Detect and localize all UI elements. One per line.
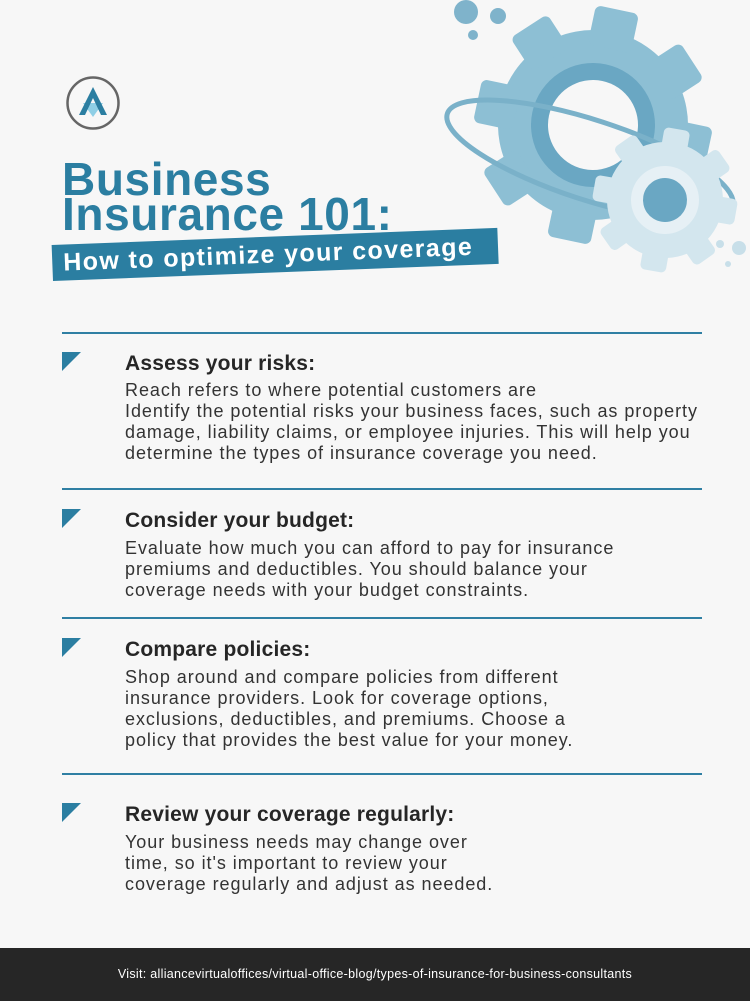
- item 1: [62, 352, 698, 463]
- item 3: [62, 638, 573, 750]
- logo: [66, 76, 120, 130]
- item 4: [62, 803, 493, 894]
- body: [125, 832, 493, 894]
- heading: Review your coverage regularly:: [125, 803, 455, 826]
- item 2: [62, 509, 614, 600]
- body: Evaluate how much you can afford to pay for insurance: [125, 538, 614, 558]
- body: Reach refers to where potential customers are: [125, 380, 537, 400]
- body: determine the types of insurance coverage you need.: [125, 443, 598, 463]
- marker: [62, 803, 81, 822]
- body: [125, 380, 698, 463]
- bubbles: [454, 0, 746, 267]
- body: Identify the potential risks your business faces, such as property: [125, 401, 698, 421]
- footer: [0, 948, 750, 1001]
- small gear: [582, 117, 748, 283]
- body: policy that provides the best value for your money.: [125, 730, 573, 750]
- body: coverage regularly and adjust as needed.: [125, 874, 493, 894]
- body: exclusions, deductibles, and premiums. Choose a: [125, 709, 566, 729]
- body: [125, 538, 614, 600]
- big gear: [453, 0, 733, 265]
- body: Your business needs may change over: [125, 832, 468, 852]
- title: Insurance 101:: [62, 188, 393, 240]
- body: premiums and deductibles. You should balance your: [125, 559, 588, 579]
- heading: Assess your risks:: [125, 352, 315, 375]
- gears illustration: [444, 0, 746, 272]
- body: time, so it's important to review your: [125, 853, 448, 873]
- body: Shop around and compare policies from different: [125, 667, 559, 687]
- title: Business: [62, 153, 271, 205]
- body: coverage needs with your budget constraints.: [125, 580, 529, 600]
- body: insurance providers. Look for coverage options,: [125, 688, 549, 708]
- body: damage, liability claims, or employee injuries. This will help you: [125, 422, 691, 442]
- orbit ring: [435, 76, 745, 244]
- subtitle banner: How to optimize your coverage: [63, 233, 474, 277]
- marker: [62, 509, 81, 528]
- marker: [62, 352, 81, 371]
- heading: Compare policies:: [125, 638, 310, 661]
- footer: Visit: alliancevirtualoffices/virtual-office-blog/types-of-insurance-for-business-consultants: [118, 967, 632, 981]
- body: [125, 667, 573, 750]
- marker: [62, 638, 81, 657]
- heading: Consider your budget:: [125, 509, 354, 532]
- title: [62, 153, 393, 240]
